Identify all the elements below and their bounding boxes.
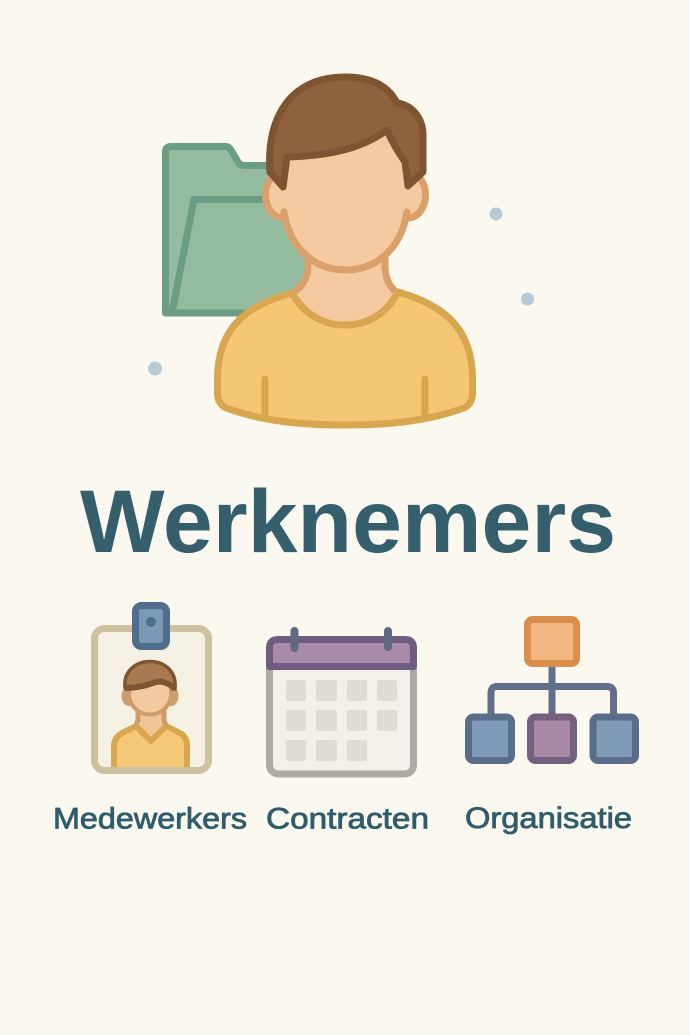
label: Organisatie: Organisatie — [465, 802, 632, 835]
person collar — [292, 292, 398, 325]
person face — [283, 120, 408, 270]
org connectors — [491, 667, 614, 714]
org top box — [528, 620, 576, 664]
icon: main person — [218, 77, 472, 425]
icon: decorative dots — [148, 208, 534, 376]
person neck — [295, 250, 395, 322]
badge clip — [136, 606, 166, 646]
label: Contracten: Contracten — [266, 802, 429, 836]
calendar body — [270, 640, 414, 774]
title: Werknemers — [80, 471, 616, 571]
person shirt — [218, 292, 472, 425]
person shirt seams — [265, 379, 425, 414]
icon: organisation chart — [468, 620, 636, 760]
badge person — [114, 662, 187, 767]
calendar header — [270, 640, 414, 666]
calendar rings — [294, 631, 388, 648]
person hair — [270, 77, 423, 187]
icon: calendar — [270, 631, 414, 774]
icon: green folder — [166, 146, 310, 313]
person ears — [266, 172, 300, 218]
calendar cells — [286, 680, 397, 761]
icon: ID badge — [94, 606, 208, 770]
badge card — [94, 628, 208, 770]
org left box — [468, 717, 512, 760]
org middle box — [530, 717, 574, 760]
label: Medewerkers: Medewerkers — [53, 802, 247, 836]
org right box — [593, 717, 636, 760]
